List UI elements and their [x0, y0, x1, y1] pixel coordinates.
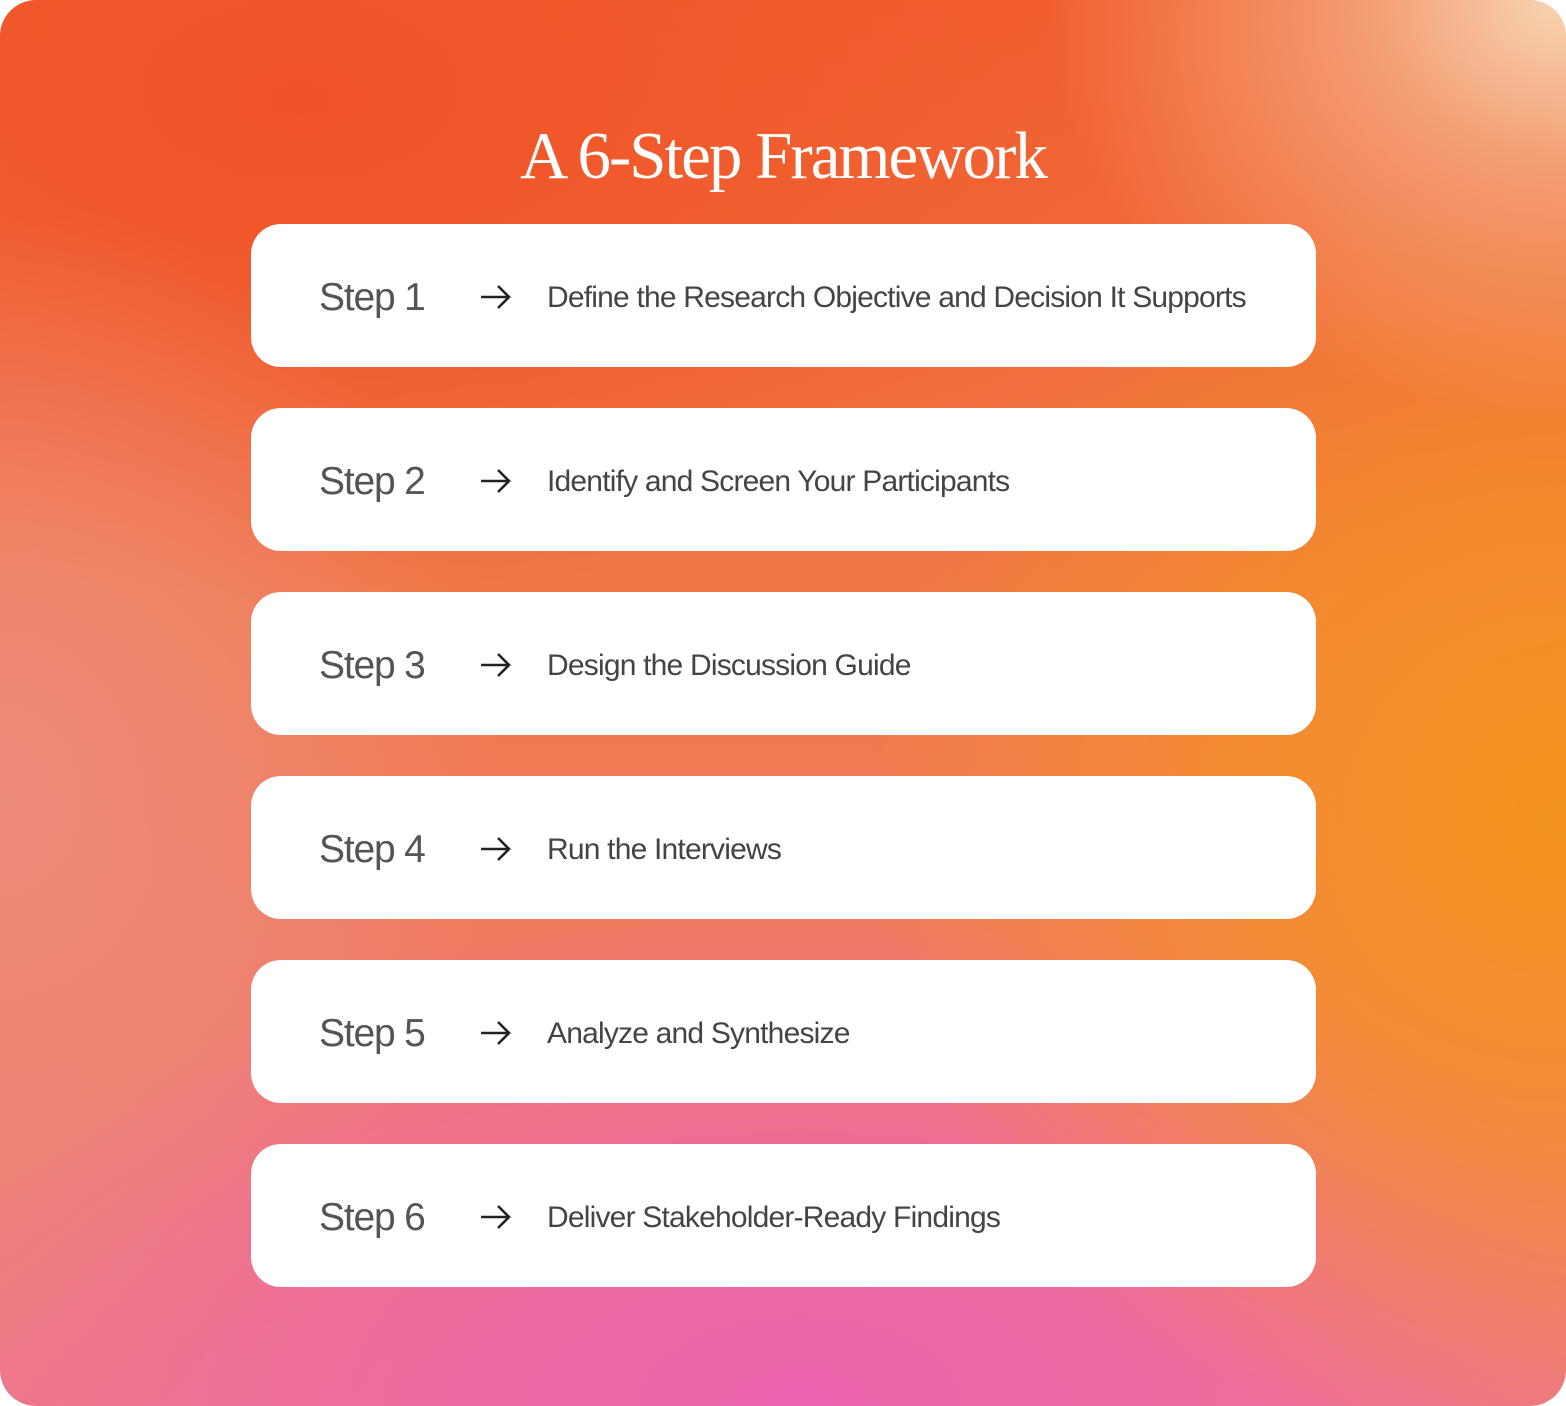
step label 2: Step 2 — [319, 460, 425, 503]
arrow 4 — [481, 837, 511, 861]
step label 5: Step 5 — [319, 1012, 425, 1055]
arrow 2 — [481, 469, 511, 493]
step label 4: Step 4 — [319, 828, 425, 871]
description 4: Run the Interviews — [547, 833, 781, 866]
card: step 4 — [251, 776, 1316, 919]
step label 3: Step 3 — [319, 644, 425, 687]
arrow 6 — [481, 1205, 511, 1229]
card: step 2 — [251, 408, 1316, 551]
card: step 5 — [251, 960, 1316, 1103]
description 2: Identify and Screen Your Participants — [547, 465, 1009, 498]
card: step 1 — [251, 224, 1316, 367]
description 6: Deliver Stakeholder-Ready Findings — [547, 1201, 1000, 1234]
arrow 3 — [481, 653, 511, 677]
card: step 6 — [251, 1144, 1316, 1287]
card: step 3 — [251, 592, 1316, 735]
step label 1: Step 1 — [319, 276, 425, 319]
description 3: Design the Discussion Guide — [547, 649, 911, 682]
description 1: Define the Research Objective and Decision It Supports — [547, 281, 1246, 314]
title: A 6-Step Framework — [520, 119, 1046, 193]
description 5: Analyze and Synthesize — [547, 1017, 850, 1050]
arrow 1 — [481, 285, 511, 309]
step label 6: Step 6 — [319, 1196, 425, 1239]
arrow 5 — [481, 1021, 511, 1045]
